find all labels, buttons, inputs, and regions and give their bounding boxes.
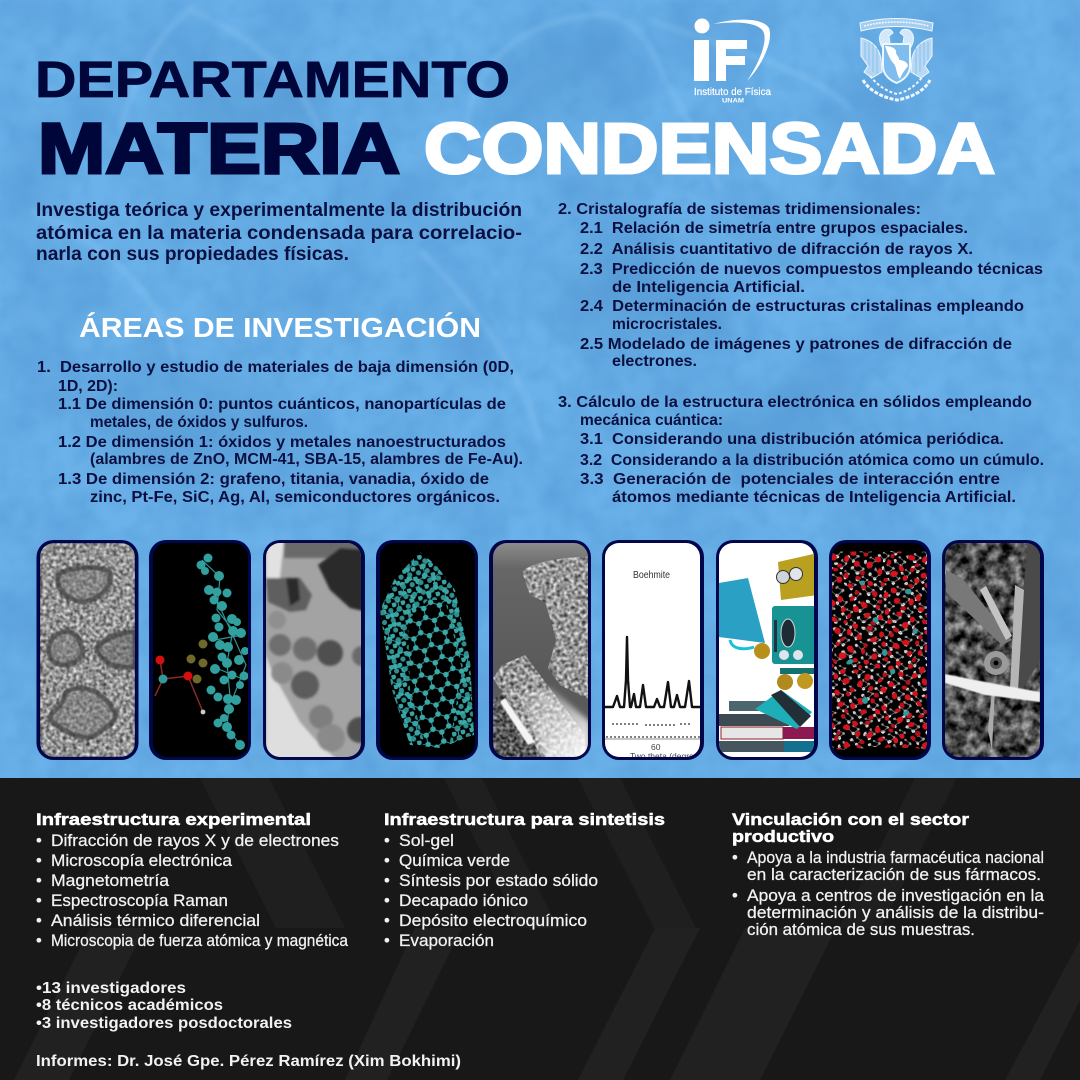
- staff counts: •3 investigadores posdoctorales: [36, 1015, 292, 1032]
- research list: area 2: de Inteligencia Artificial.: [612, 279, 805, 296]
- image strip: [36, 538, 1044, 762]
- experimental equipment list: •: [36, 832, 42, 850]
- heading: áreas de investigación: ÁREAS DE INVESTIGACIÓN: [79, 312, 481, 343]
- logo: Instituto de Física: Instituto de Física: [694, 87, 771, 98]
- column: infraestructura para sintetisis: [384, 811, 665, 950]
- image card 6: X-ray diffraction pattern: [602, 540, 706, 761]
- research list: area 1: 1.3 De dimensión 2: grafeno, titania, vanadia, óxido de: [58, 471, 489, 488]
- title word: materia: MATERIA: [38, 110, 400, 189]
- research list: area 2: microcristales.: [612, 316, 722, 333]
- column: vinculación con el sector productivo: Vinculación con el sector: [732, 811, 970, 829]
- research list: area 1: [37, 359, 523, 506]
- image card 5: porous material micrograph: [489, 540, 591, 760]
- industry links list: Apoya a centros de investigación en la: [747, 887, 1045, 905]
- blue textured background: [0, 0, 1080, 780]
- intro paragraph: narla con sus propiedades físicas.: [36, 244, 349, 265]
- column: infraestructura para sintetisis: Infraestructura para sintetisis: [384, 811, 665, 829]
- synthesis methods list: •: [384, 832, 390, 850]
- experimental equipment list: Microscopía electrónica: [51, 852, 233, 870]
- research list: area 3: 3. Cálculo de la estructura electrónica en sólidos empleando: [558, 394, 1032, 411]
- research list: area 1: metales, de óxidos y sulfuros.: [90, 414, 308, 431]
- synthesis methods list: Depósito electroquímico: [399, 912, 587, 930]
- staff counts: •8 técnicos académicos: [36, 997, 223, 1014]
- experimental equipment list: [36, 832, 349, 950]
- research list: area 2: 2.4 Determinación de estructuras cristalinas empleando: [580, 298, 1024, 315]
- staff counts: •13 investigadores: [36, 980, 186, 997]
- industry links list: •: [732, 887, 738, 905]
- image card 8: atomic cluster simulation: [828, 540, 931, 760]
- image card 1: TEM nanoparticles: [36, 540, 138, 760]
- image card 7: reading robot illustration: [716, 540, 818, 760]
- synthesis methods list: Sol-gel: [399, 832, 454, 850]
- research list: area 2: 2.5 Modelado de imágenes y patrones de difracción de: [580, 336, 1012, 353]
- intro paragraph: [36, 200, 522, 265]
- dark footer panel: [0, 778, 1080, 1080]
- research list: area 3: 3.2 Considerando a la distribución atómica como un cúmulo.: [580, 452, 1044, 469]
- experimental equipment list: Análisis térmico diferencial: [51, 912, 260, 930]
- column: infraestructura experimental: Infraestructura experimental: [36, 811, 311, 829]
- synthesis methods list: •: [384, 872, 390, 890]
- column: infraestructura experimental: [36, 811, 349, 950]
- research list: area 1: 1.1 De dimensión 0: puntos cuánticos, nanopartículas de: [58, 396, 506, 413]
- research list: area 3: [558, 394, 1044, 506]
- research list: area 1: 1. Desarrollo y estudio de materiales de baja dimensión (0D,: [37, 359, 514, 376]
- experimental equipment list: •: [36, 892, 42, 910]
- image card 6: X-ray diffraction pattern: 60: [651, 742, 661, 752]
- experimental equipment list: •: [36, 852, 42, 870]
- image card 4: carbon nanotube: [376, 540, 478, 760]
- title word: condensada: CONDENSADA: [424, 110, 995, 189]
- research list: area 1: 1D, 2D):: [58, 378, 118, 395]
- research list: area 3: 3.3 Generación de potenciales de interacción entre: [580, 471, 1000, 488]
- experimental equipment list: Espectroscopía Raman: [51, 892, 228, 910]
- intro paragraph: Investiga teórica y experimentalmente la distribución: [36, 200, 522, 221]
- research list: area 2: electrones.: [612, 353, 697, 370]
- research list: area 2: 2.1 Relación de simetría entre grupos espaciales.: [580, 220, 968, 237]
- synthesis methods list: Evaporación: [399, 932, 494, 950]
- research list: area 2: 2.2 Análisis cuantitativo de difracción de rayos X.: [580, 241, 973, 258]
- research list: area 2: 2. Cristalografía de sistemas tridimensionales:: [558, 201, 921, 218]
- industry links list: en la caracterización de sus fármacos.: [747, 866, 1041, 884]
- logo: Instituto de Física: [694, 18, 771, 104]
- column: vinculación con el sector productivo: productivo: [732, 828, 834, 846]
- experimental equipment list: Magnetometría: [51, 872, 170, 890]
- experimental equipment list: •: [36, 932, 42, 950]
- title: [35, 51, 995, 189]
- logo: Instituto de Física: UNAM: [722, 98, 744, 104]
- intro paragraph: atómica en la materia condensada para correlacio-: [36, 223, 522, 244]
- research list: area 2: 2.3 Predicción de nuevos compuestos empleando técnicas: [580, 261, 1043, 278]
- research list: area 2: [558, 201, 1043, 370]
- title line: departamento: DEPARTAMENTO: [35, 51, 510, 108]
- logo: UNAM crest: [860, 18, 933, 100]
- industry links list: ción atómica de sus muestras.: [747, 921, 975, 939]
- experimental equipment list: Difracción de rayos X y de electrones: [51, 832, 339, 850]
- experimental equipment list: •: [36, 912, 42, 930]
- research list: area 3: átomos mediante técnicas de Inteligencia Artificial.: [612, 489, 1016, 506]
- contact line: Informes: Dr. José Gpe. Pérez Ramírez (Xim Bokhimi): [36, 1053, 461, 1070]
- image card 6: X-ray diffraction pattern: Boehmite: [633, 569, 670, 581]
- column: vinculación con el sector productivo: [732, 811, 1045, 939]
- industry links list: determinación y análisis de la distribu-: [747, 904, 1044, 922]
- image card 9: SEM crystals: [942, 540, 1044, 760]
- synthesis methods list: Decapado iónico: [399, 892, 528, 910]
- image card 3: TEM crystal grains: [263, 538, 373, 762]
- research list: area 1: (alambres de ZnO, MCM-41, SBA-15, alambres de Fe-Au).: [90, 451, 523, 468]
- industry links list: Apoya a la industria farmacéutica nacional: [747, 849, 1044, 867]
- synthesis methods list: Química verde: [399, 852, 510, 870]
- research list: area 3: mecánica cuántica:: [580, 412, 723, 429]
- synthesis methods list: •: [384, 932, 390, 950]
- image card 6: X-ray diffraction pattern: Two theta (degrees): [630, 751, 706, 761]
- synthesis methods list: •: [384, 912, 390, 930]
- research list: area 1: zinc, Pt-Fe, SiC, Ag, Al, semiconductores orgánicos.: [90, 489, 500, 506]
- research list: area 1: 1.2 De dimensión 1: óxidos y metales nanoestructurados: [58, 434, 506, 451]
- synthesis methods list: •: [384, 892, 390, 910]
- industry links list: [732, 849, 1045, 939]
- staff counts: [36, 980, 292, 1032]
- image card 2: molecule on cluster: [149, 540, 251, 760]
- synthesis methods list: [384, 832, 598, 950]
- experimental equipment list: Microscopia de fuerza atómica y magnética: [51, 932, 349, 950]
- experimental equipment list: •: [36, 872, 42, 890]
- industry links list: •: [732, 849, 738, 867]
- research list: area 3: 3.1 Considerando una distribución atómica periódica.: [580, 431, 1004, 448]
- synthesis methods list: Síntesis por estado sólido: [399, 872, 598, 890]
- synthesis methods list: •: [384, 852, 390, 870]
